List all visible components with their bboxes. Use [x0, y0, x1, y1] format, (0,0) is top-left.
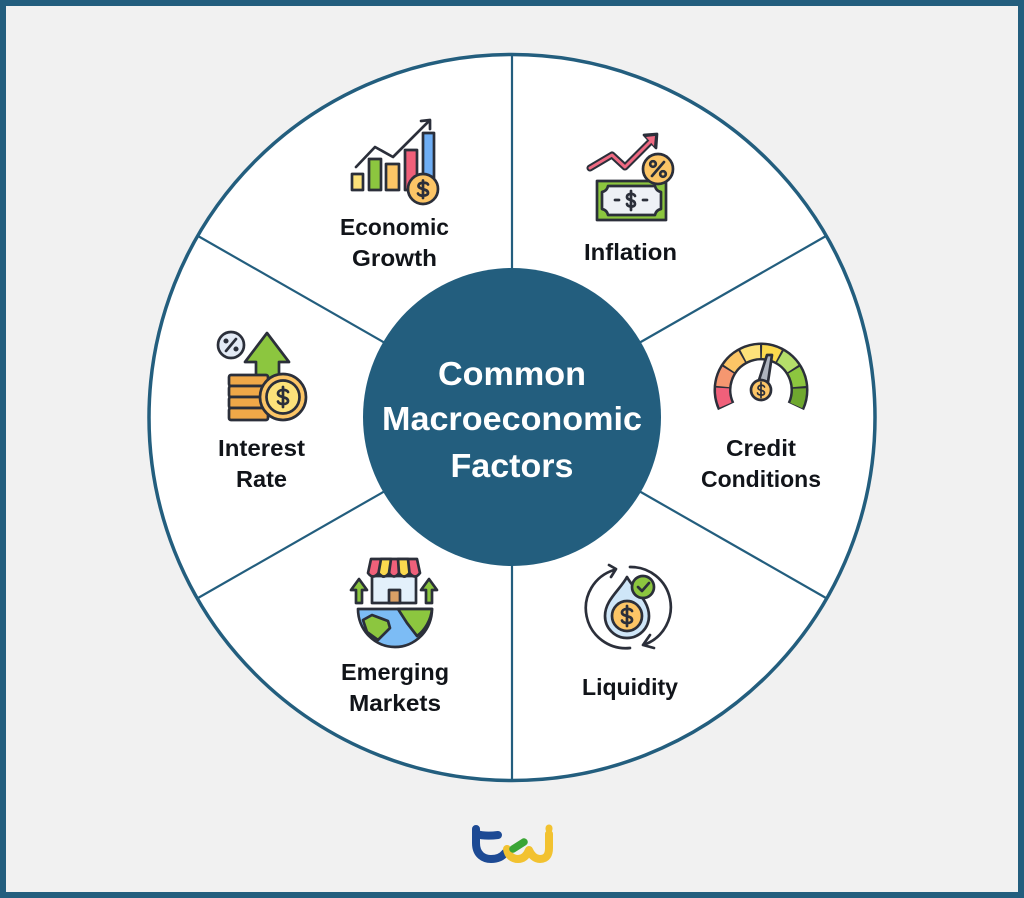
panel: inflation [584, 134, 677, 265]
label: interest rate: Rate [236, 466, 287, 492]
label: emerging markets: Emerging [341, 659, 449, 685]
panel: credit conditions [701, 337, 821, 492]
central hub [363, 268, 661, 566]
label: emerging markets: Markets [349, 690, 441, 716]
panel: economic growth [340, 120, 449, 271]
label: interest rate: Interest [218, 435, 305, 461]
icon: liquidity drop with cycle arrows [586, 565, 671, 648]
panel: emerging markets [341, 559, 449, 716]
icon: credit gauge [708, 337, 814, 443]
hub title: Factors [450, 447, 574, 484]
panel: liquidity [582, 565, 678, 700]
label: interest rate [218, 435, 305, 492]
icon: banknote with rising arrow and percent [590, 134, 673, 220]
label: inflation: Inflation [584, 239, 677, 265]
logo: tej [476, 828, 549, 859]
icon: storefront on globe [351, 559, 437, 647]
panel: interest rate [218, 332, 306, 492]
hub title: Macroeconomic [382, 400, 642, 437]
icon: coins with up arrow and percent [218, 332, 306, 420]
label: emerging markets [341, 659, 449, 716]
hub circle [363, 268, 661, 566]
hub title [382, 355, 642, 484]
label: credit conditions: Conditions [701, 466, 821, 492]
label: credit conditions: Credit [726, 435, 796, 461]
wheel disc [149, 54, 875, 780]
icon: growth bars with coin [352, 120, 438, 204]
label: economic growth [340, 214, 449, 271]
hub title: Common [438, 355, 586, 392]
label: liquidity: Liquidity [582, 674, 678, 700]
label: economic growth: Economic [340, 214, 449, 240]
label: credit conditions [701, 435, 821, 492]
label: economic growth: Growth [352, 245, 437, 271]
wheel spokes [198, 54, 826, 780]
